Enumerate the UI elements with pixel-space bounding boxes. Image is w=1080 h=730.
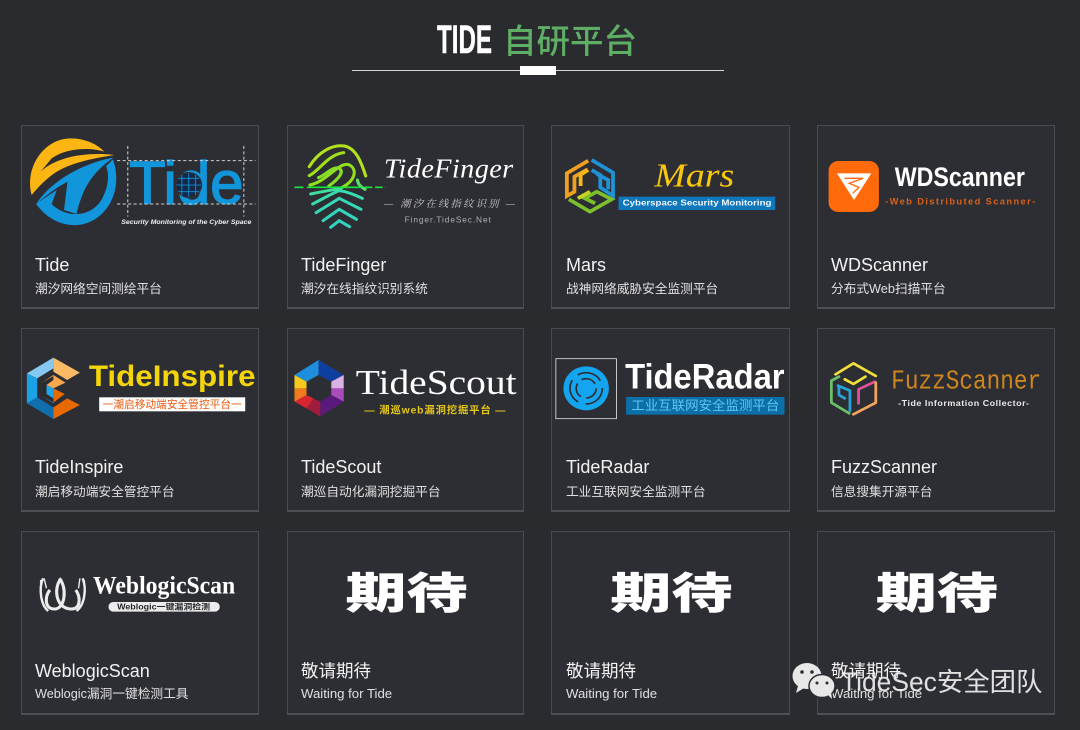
logo: TideRadar (556, 357, 785, 419)
logo: TideRadar: 工业互联网安全监测平台 (631, 397, 779, 413)
logo: TideScout: — 潮巡web漏洞挖掘平台 — (364, 403, 506, 416)
title (352, 18, 724, 75)
title: TIDE (437, 18, 492, 62)
logo: WeblogicScan: Weblogic一键漏洞检测 (117, 602, 210, 612)
panel: TideInspire: TideInspire (35, 457, 123, 477)
logo: 期待: 期待 (345, 570, 468, 618)
logo: WeblogicScan: WeblogicScan (93, 572, 235, 599)
watermark (792, 663, 1042, 699)
panel: TideRadar (551, 328, 790, 512)
logo: TideFinger: Finger.TideSec.Net (405, 216, 492, 225)
panel: Tide: 潮汐网络空间测绘平台 (35, 281, 162, 296)
logo: Mars: Cyberspace Security Monitoring (623, 198, 771, 208)
panel: Waiting 2 (551, 532, 790, 715)
panel: TideScout: 潮巡自动化漏洞挖掘平台 (301, 484, 441, 499)
panel: TideFinger: 潮汐在线指纹识别系统 (301, 281, 428, 296)
panel: WDScanner (817, 126, 1055, 309)
panel: TideFinger: TideFinger (301, 255, 386, 275)
panel: WDScanner: 分布式Web扫描平台 (831, 282, 946, 296)
icon: wechat (792, 663, 835, 699)
panel: Tide (21, 126, 259, 309)
logo: TideRadar: TideRadar (625, 357, 785, 396)
logo: TideInspire (27, 358, 256, 419)
panel: TideInspire: 潮启移动端安全管控平台 (35, 484, 175, 499)
panel: TideRadar: TideRadar (566, 457, 649, 477)
logo: FuzzScanner (831, 363, 1041, 414)
logo: WeblogicScan (41, 572, 235, 612)
logo: TideScout: TideScout (356, 363, 517, 402)
panel: Waiting 2: 敬请期待 (566, 661, 636, 681)
panel: Mars (551, 126, 790, 309)
logo: Mars (567, 158, 775, 212)
logo: FuzzScanner: -Tide Information Collector- (898, 398, 1029, 408)
panel: TideInspire (21, 328, 259, 512)
panel: Waiting 1: 敬请期待 (301, 661, 371, 681)
panel: WeblogicScan: WeblogicScan (35, 661, 150, 681)
logo: WDScanner: -Web Distributed Scanner- (885, 196, 1035, 206)
logo: Tide: Security Monitoring of the Cyber Space (121, 219, 252, 226)
logo: 期待: 期待 (876, 570, 998, 618)
logo: FuzzScanner: FuzzScanner (891, 367, 1041, 397)
panel: Waiting 3: 敬请期待 (831, 661, 901, 681)
logo: TideInspire: TideInspire (89, 360, 256, 393)
panel: WDScanner: WDScanner (831, 255, 928, 275)
logo: TideInspire: 一潮启移动端安全管控平台一 (103, 397, 242, 411)
logo: WDScanner: WDScanner (895, 161, 1025, 192)
logo: TideFinger: TideFinger (384, 154, 513, 184)
title: 自研平台 (503, 24, 637, 61)
panel: Waiting 3 (817, 532, 1055, 715)
panel: FuzzScanner: 信息搜集开源平台 (831, 484, 932, 499)
panel: Waiting 1: Waiting for Tide (301, 686, 392, 701)
panel: Mars: 战神网络威胁安全监测平台 (566, 281, 718, 296)
panel: Waiting 3: Waiting for Tide (831, 686, 922, 701)
panel: FuzzScanner: FuzzScanner (831, 457, 937, 477)
logo: Tide: Tide (129, 149, 243, 216)
panel: FuzzScanner (817, 328, 1055, 512)
watermark: TideSec安全团队 (841, 667, 1042, 697)
panel: Tide: Tide (35, 255, 69, 275)
panel: TideRadar: 工业互联网安全监测平台 (566, 484, 706, 499)
logo: WDScanner (829, 161, 1035, 212)
logo: TideScout (294, 360, 517, 417)
logo: TideFinger (294, 146, 516, 227)
panel: TideFinger (287, 126, 524, 309)
logo: TideFinger: — 潮汐在线指纹识别 — (383, 198, 516, 210)
panel: Mars: Mars (566, 255, 606, 275)
panel: TideScout: TideScout (301, 457, 381, 477)
panel: Waiting 2: Waiting for Tide (566, 686, 657, 701)
panel: WeblogicScan (21, 532, 259, 715)
logo: 期待: 期待 (610, 570, 733, 618)
panel: Waiting 1 (287, 532, 524, 715)
panel: WeblogicScan: Weblogic漏洞一键检测工具 (35, 686, 189, 701)
logo: Tide (30, 138, 256, 226)
logo: Mars: Mars (653, 158, 734, 195)
panel: TideScout (287, 328, 524, 512)
